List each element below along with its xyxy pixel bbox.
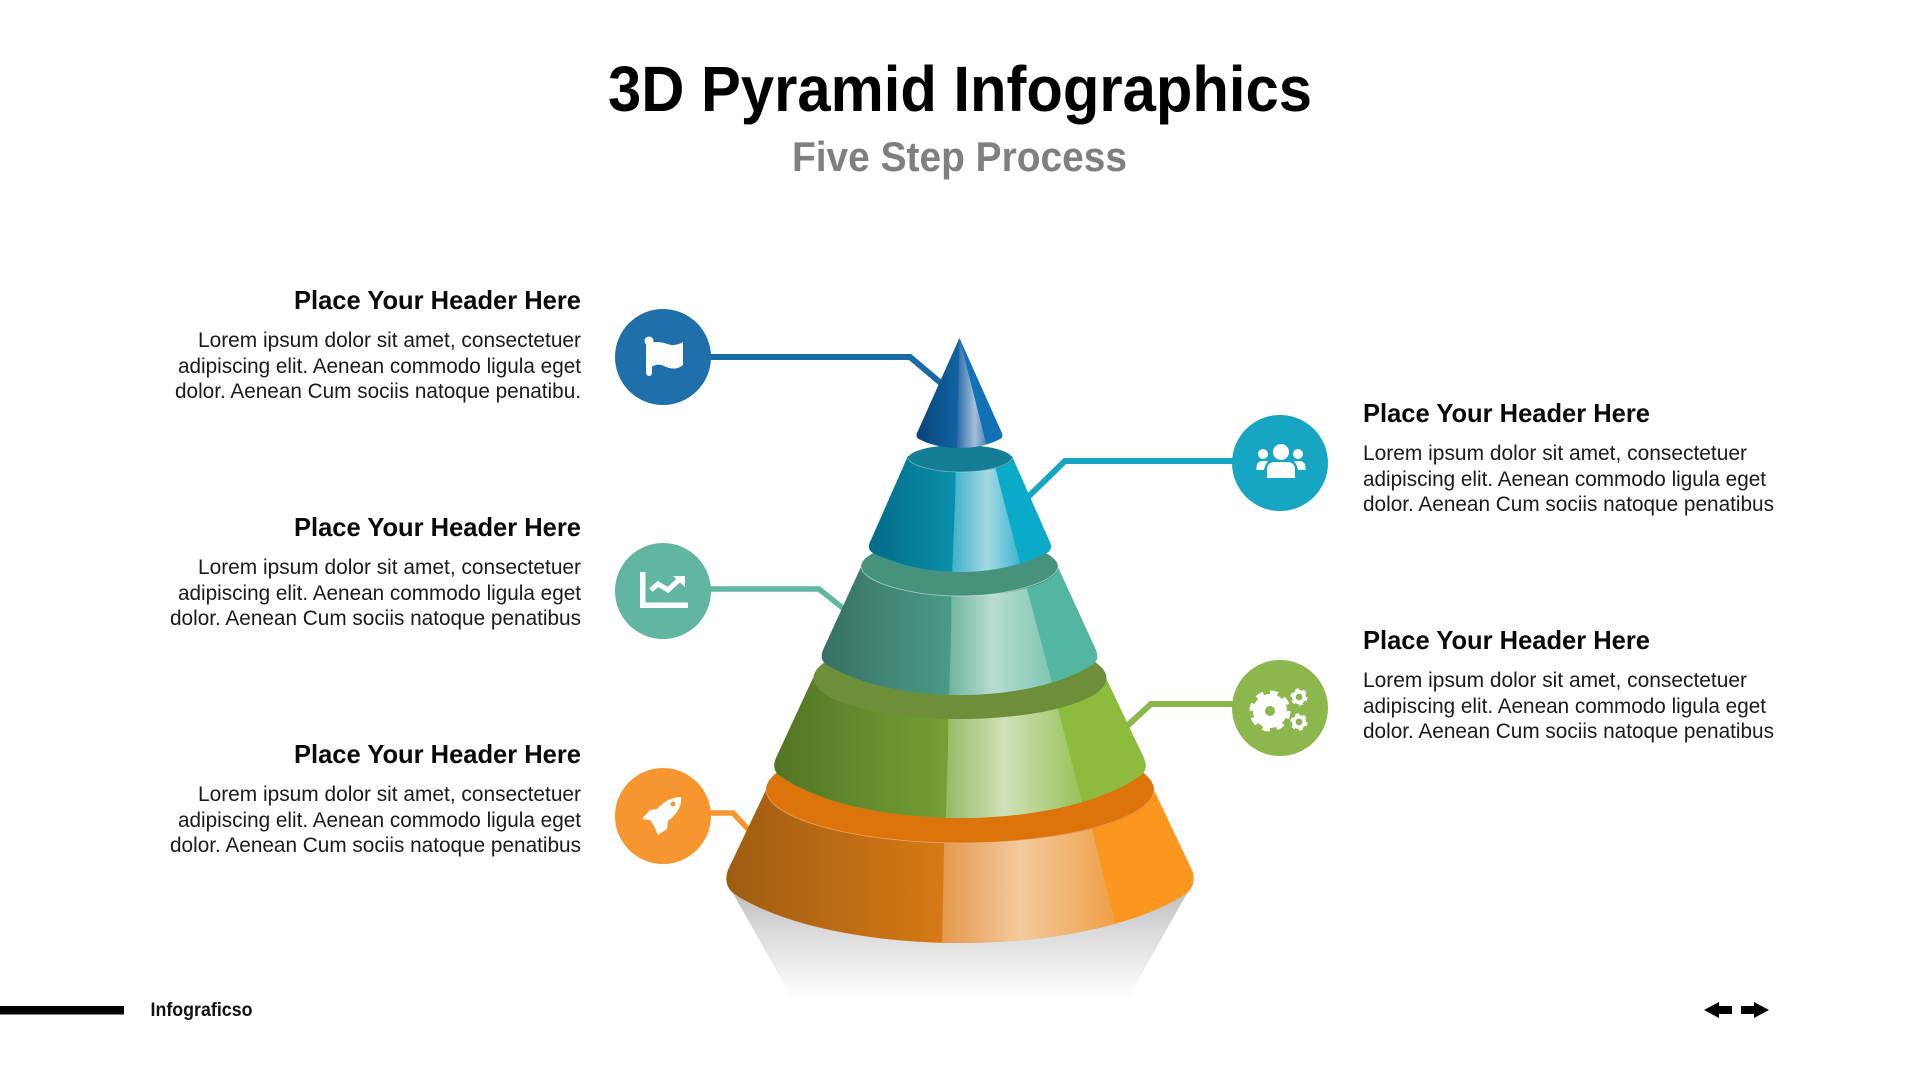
pyramid [720,335,1200,998]
connector: orange [705,813,749,830]
connector: teal [1028,461,1238,497]
tier 2: teal [865,445,1055,575]
tier 1: blue cone [916,338,1002,448]
title: 3D Pyramid Infographics [608,53,1312,125]
pyramid shadow [730,888,1190,998]
tier 4: green [774,662,1146,818]
text block: step 5: dolor. Aenean Cum sociis natoque penatibus [170,833,581,857]
text block: step 5: Place Your Header Here [294,739,581,769]
footer bar [0,1006,124,1014]
text block: step 1 [175,285,581,403]
text block: step 1: Place Your Header Here [294,285,581,315]
icon: next arrow [1741,1002,1769,1018]
text block: step 3: adipiscing elit. Aenean commodo ligula eget [178,581,581,605]
text block: step 3: dolor. Aenean Cum sociis natoque penatibus [170,606,581,630]
text block: step 4: adipiscing elit. Aenean commodo ligula eget [1363,694,1766,718]
text block: step 4: Lorem ipsum dolor sit amet, consectetuer [1363,668,1747,692]
text block: step 3 [170,512,581,630]
step 2 icon: people [1232,415,1328,511]
text block: step 2: dolor. Aenean Cum sociis natoque penatibus [1363,492,1774,516]
text block: step 5: Lorem ipsum dolor sit amet, consectetuer [198,782,581,806]
text block: step 1: adipiscing elit. Aenean commodo ligula eget [178,354,581,378]
text block: step 4: Place Your Header Here [1363,625,1650,655]
text block: step 2 [1363,398,1774,516]
connector: blue [705,357,942,384]
text block: step 3: Lorem ipsum dolor sit amet, consectetuer [198,555,581,579]
text block: step 2: Place Your Header Here [1363,398,1650,428]
step 4 icon: gears [1232,660,1328,756]
subtitle: Five Step Process [792,133,1127,180]
text block: step 1: Lorem ipsum dolor sit amet, consectetuer [198,328,581,352]
text block: step 5 [170,739,581,857]
tier 3: mint [822,553,1098,695]
connector: green [1126,704,1238,727]
text block: step 4: dolor. Aenean Cum sociis natoque penatibus [1363,719,1774,743]
icon: previous arrow [1704,1002,1732,1018]
step 1 icon: flag [615,309,711,405]
step 5 icon: rocket [615,768,711,864]
text block: step 4 [1363,625,1774,743]
text block: step 5: adipiscing elit. Aenean commodo ligula eget [178,808,581,832]
footer brand: Infograficso [150,1000,252,1021]
connector: mint [705,589,844,609]
tier 5: orange [726,772,1194,943]
text block: step 3: Place Your Header Here [294,512,581,542]
step 3 icon: chart [615,543,711,639]
text block: step 2: Lorem ipsum dolor sit amet, consectetuer [1363,441,1747,465]
text block: step 2: adipiscing elit. Aenean commodo ligula eget [1363,467,1766,491]
text block: step 1: dolor. Aenean Cum sociis natoque penatibu. [175,379,581,403]
